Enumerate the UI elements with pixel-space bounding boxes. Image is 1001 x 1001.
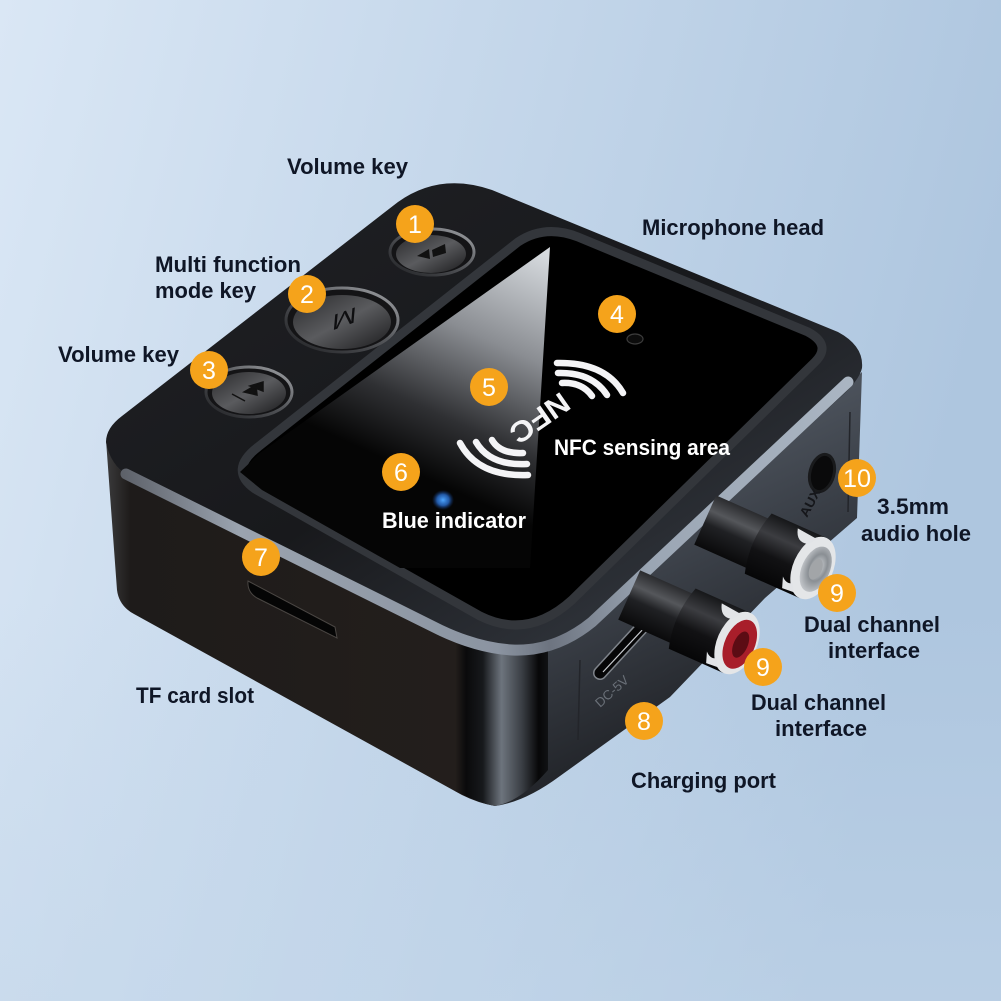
badge 10 <box>838 459 876 497</box>
AUX jack: AUX <box>796 486 824 519</box>
badge 2 <box>288 275 326 313</box>
badge 9 upper: 9 <box>830 580 844 608</box>
label: 3.5mm audio hole: 3.5mm <box>877 494 949 519</box>
label: charging port: Charging port <box>631 768 777 793</box>
USB-C charging port <box>592 623 646 710</box>
label: volume key left: Volume key <box>58 342 180 367</box>
label: TF card slot: TF card slot <box>136 683 255 708</box>
badge 4: 4 <box>610 301 624 329</box>
button: volume down <box>206 367 292 417</box>
label: dual channel interface lower: interface <box>775 716 867 741</box>
badge 3 <box>190 351 228 389</box>
card slot <box>248 581 337 638</box>
left front face <box>106 440 512 806</box>
badge 2: 2 <box>300 281 314 309</box>
badge 4 <box>598 295 636 333</box>
label: multi function mode key: Multi function <box>155 252 301 277</box>
front corner highlight <box>455 632 548 806</box>
badge 9 lower: 9 <box>756 654 770 682</box>
AUX jack <box>796 452 839 519</box>
badge 9 upper <box>818 574 856 612</box>
badge 3: 3 <box>202 357 216 385</box>
badge 7: 7 <box>254 544 268 572</box>
microphone hole <box>627 334 643 344</box>
USB-C charging port: DC-5V <box>592 672 632 710</box>
label: multi function mode key <box>155 252 301 303</box>
device: receiver body <box>106 183 862 806</box>
label: dual channel interface lower <box>751 690 886 741</box>
button: multi function M: M <box>331 302 358 336</box>
blue LED <box>432 490 454 510</box>
RCA connector: red <box>616 565 769 681</box>
top face <box>106 183 862 651</box>
badge 5: 5 <box>482 374 496 402</box>
number badges <box>190 205 876 740</box>
side panel inset line <box>578 412 850 740</box>
badge 6: 6 <box>394 459 408 487</box>
button: multi function M <box>286 288 398 352</box>
label: 3.5mm audio hole <box>861 494 971 546</box>
RCA connector: white <box>692 490 845 606</box>
label: dual channel interface upper <box>804 612 940 663</box>
icon: NFC logo: NFC <box>503 385 575 449</box>
right side face <box>495 372 862 806</box>
badge 10: 10 <box>843 465 871 493</box>
badge 7 <box>242 538 280 576</box>
badge 6 <box>382 453 420 491</box>
label: dual channel interface upper: interface <box>828 638 920 663</box>
label: 3.5mm audio hole: audio hole <box>861 521 971 546</box>
label: microphone head: Microphone head <box>642 215 824 240</box>
label: NFC sensing area: NFC sensing area <box>554 435 731 460</box>
badge 8 <box>625 702 663 740</box>
screen reflection <box>240 247 550 568</box>
label: multi function mode key: mode key <box>155 278 257 303</box>
label: dual channel interface upper: Dual channel <box>804 612 940 637</box>
icon: NFC logo <box>460 363 623 475</box>
screen lip <box>242 232 822 625</box>
badge 9 lower <box>744 648 782 686</box>
button: volume up <box>390 229 474 275</box>
label: blue indicator: Blue indicator <box>382 508 526 533</box>
badge 5 <box>470 368 508 406</box>
metal rim band <box>126 382 848 650</box>
badge 1 <box>396 205 434 243</box>
badge 8: 8 <box>637 708 651 736</box>
label: volume key top: Volume key <box>287 154 409 179</box>
label: dual channel interface lower: Dual channel <box>751 690 886 715</box>
badge 1: 1 <box>408 211 422 239</box>
